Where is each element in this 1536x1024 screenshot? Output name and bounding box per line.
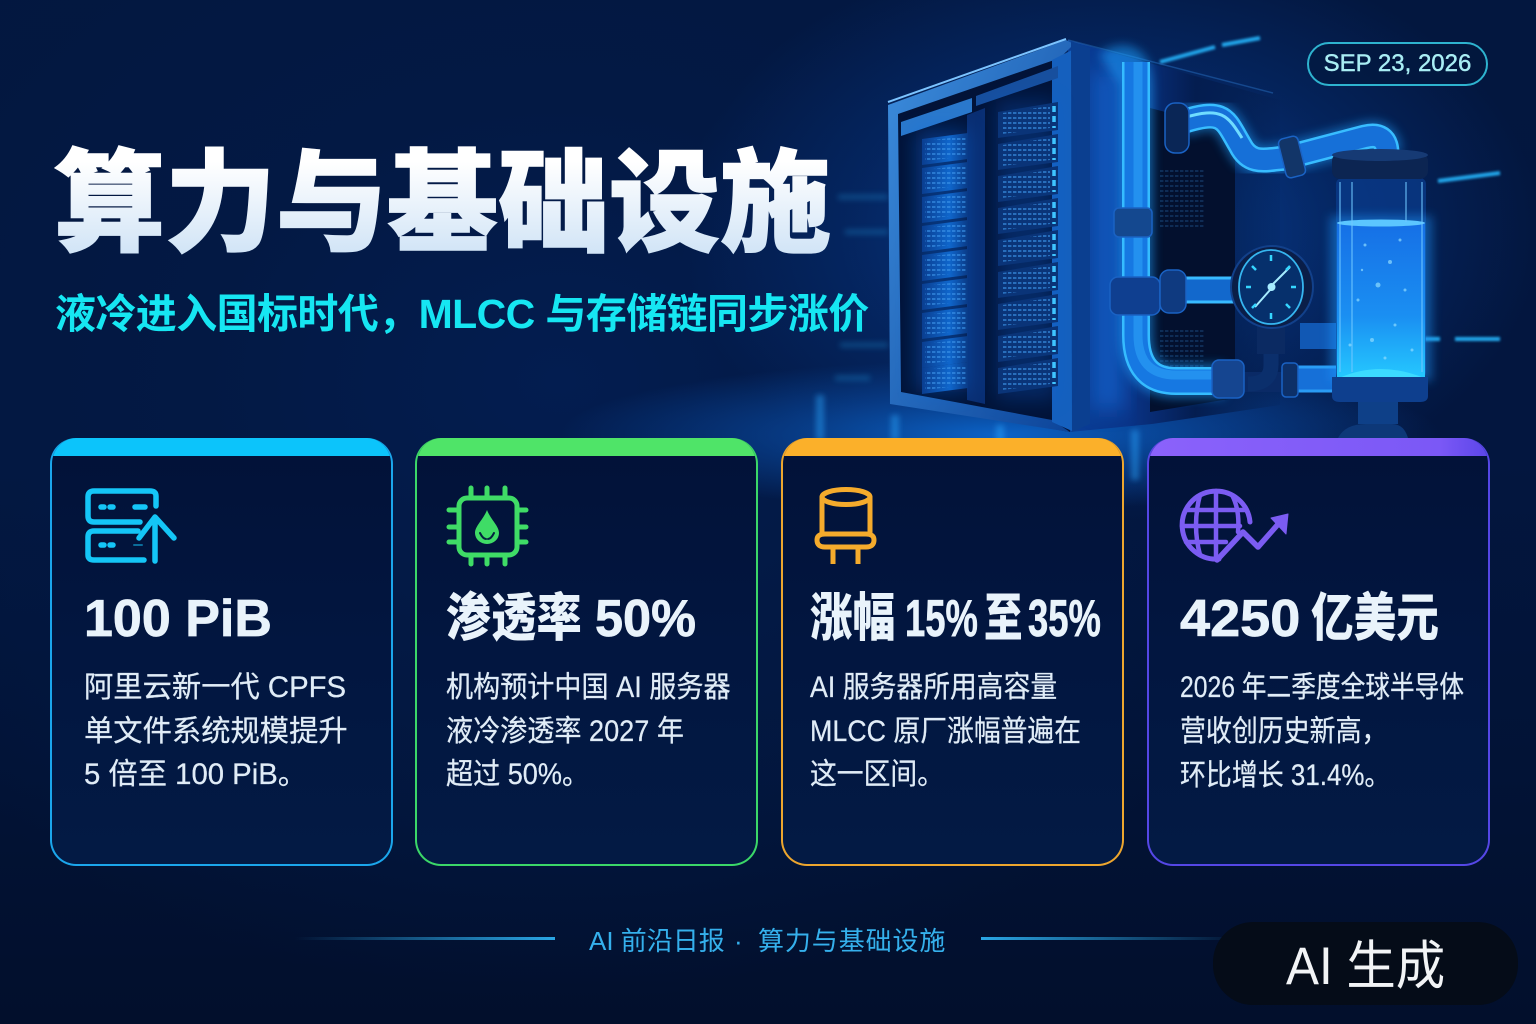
AI-generated badge — [1213, 922, 1518, 1005]
stat: 15% — [904, 590, 977, 648]
description: 机构预计中国 AI 服务器 — [446, 671, 731, 704]
footer rule left — [295, 937, 555, 940]
pressure gauge — [1231, 246, 1313, 354]
description: 超过 50%。 — [446, 758, 589, 791]
panel: card penetration — [415, 438, 758, 866]
server units, left door — [922, 133, 968, 394]
stat — [446, 590, 696, 648]
stat: 35% — [1028, 590, 1100, 648]
footer label: 算力与基础设施 — [758, 926, 946, 956]
rack front face — [888, 39, 1090, 432]
description — [810, 671, 1081, 791]
panel: card MLCC price — [781, 438, 1124, 866]
description: 环比增长 31.4%。 — [1180, 759, 1390, 792]
description: 5 倍至 100 PiB。 — [84, 758, 307, 791]
stat: 渗透率 — [446, 590, 582, 648]
description: 单文件系统规模提升 — [84, 714, 348, 748]
stat: 至 — [984, 590, 1022, 648]
rack right side — [1068, 40, 1280, 432]
footer rule right — [981, 937, 1241, 940]
panel: card 100 PiB — [50, 438, 393, 866]
stat: 涨幅 — [810, 590, 895, 648]
stat — [810, 590, 1100, 648]
title: 算力与基础设施 — [54, 113, 831, 274]
date badge: SEP 23, 2026 — [1324, 50, 1471, 77]
description — [84, 671, 348, 791]
description: MLCC 原厂涨幅普遍在 — [810, 714, 1081, 748]
icon: globe with trend arrow — [1180, 488, 1288, 563]
server units, right door — [998, 102, 1058, 394]
description — [1180, 671, 1464, 792]
description: AI 服务器所用高容量 — [810, 671, 1057, 704]
stat: 50% — [595, 590, 696, 648]
coolant pipes — [1108, 62, 1387, 384]
stat: 4250 — [1180, 590, 1300, 648]
icon: capacitor — [814, 487, 876, 564]
description: 这一区间。 — [810, 758, 944, 791]
description: 阿里云新一代 CPFS — [84, 671, 346, 704]
date badge — [1307, 42, 1488, 86]
stat: 亿美元 — [1310, 590, 1438, 648]
description — [446, 671, 731, 791]
footer label — [589, 926, 946, 956]
footer label: · — [734, 926, 743, 956]
description: 2026 年二季度全球半导体 — [1180, 671, 1464, 704]
icon: chip with droplet — [446, 486, 528, 566]
description: 液冷渗透率 2027 年 — [446, 714, 684, 748]
AI-generated text: AI 生成 — [1286, 937, 1445, 996]
stat — [1180, 590, 1438, 648]
icon: server with up arrow — [85, 488, 177, 564]
subtitle: 液冷进入国标时代，MLCC 与存储链同步涨价 — [55, 291, 869, 337]
description: 营收创历史新高， — [1180, 715, 1387, 748]
coolant reservoir tank — [1330, 149, 1432, 438]
panel: card revenue — [1147, 438, 1490, 866]
stat: 100 PiB — [84, 590, 272, 648]
footer label: AI 前沿日报 — [589, 926, 725, 956]
pipe fittings and collars — [1110, 103, 1307, 398]
